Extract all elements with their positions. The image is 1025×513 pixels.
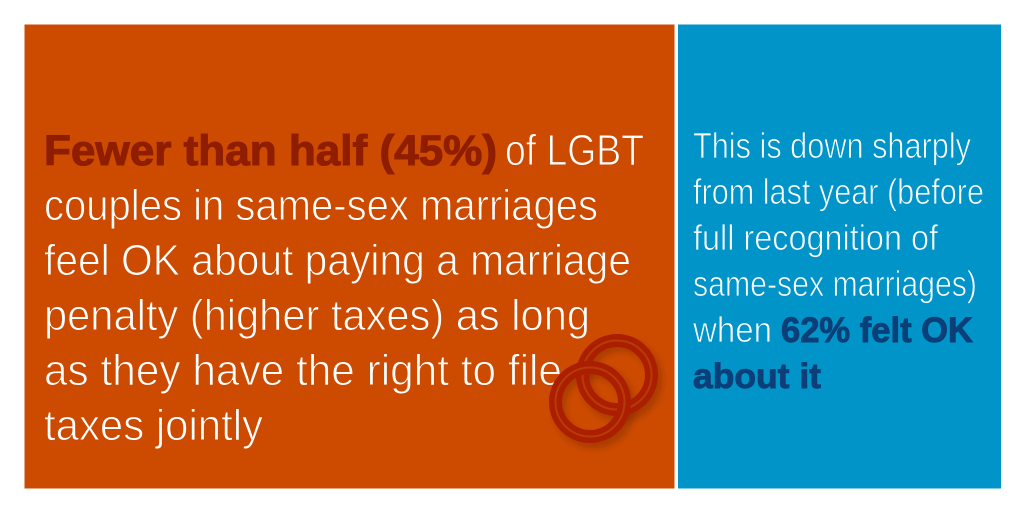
left statement text: as they have the right to file — [44, 346, 562, 395]
right statement text: about it — [693, 357, 821, 396]
right statement text: full recognition of — [693, 217, 939, 258]
left statement text: penalty (higher taxes) as long — [44, 291, 590, 340]
panel: right blue — [678, 24, 1001, 488]
right statement text: 62% felt OK — [781, 311, 973, 350]
icon: wedding rings — [556, 340, 656, 442]
right statement text: This is down sharply — [693, 125, 971, 166]
left statement text: Fewer than half (45%) — [44, 127, 497, 175]
right statement text — [692, 125, 984, 396]
left statement text — [44, 126, 644, 450]
left statement text: couples in same-sex marriages — [44, 181, 598, 230]
left statement text: taxes jointly — [44, 401, 263, 450]
right statement text: same-sex marriages) — [693, 263, 977, 304]
left statement text: of LGBT — [505, 126, 644, 175]
panel: left orange — [24, 24, 674, 488]
right statement text: when — [692, 309, 772, 350]
right statement text: from last year (before — [693, 171, 984, 212]
left statement text: feel OK about paying a marriage — [44, 236, 631, 285]
